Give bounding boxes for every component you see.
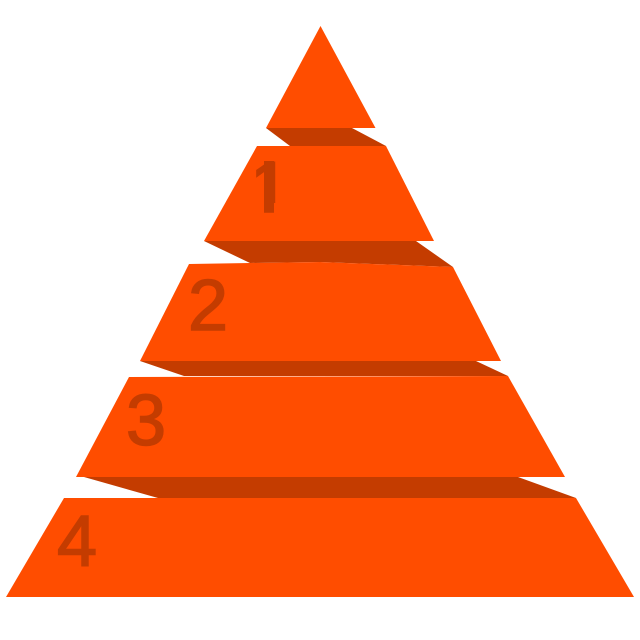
shadow between top and tier 1 [266,128,386,146]
tier 3 [76,376,565,477]
shadow between tier 2 and tier 3 [140,361,508,376]
number 1: 1 [250,148,290,228]
shadow between tier 1 and tier 2 [204,241,453,267]
tier 4 [6,498,634,597]
tier 1 [204,146,434,241]
number 2: 2 [188,266,228,346]
number 3: 3 [126,381,166,461]
pyramid apex [266,26,376,128]
shadow between tier 3 and tier 4 [84,477,576,498]
number 4: 4 [57,502,97,582]
tier 2 [140,262,501,361]
